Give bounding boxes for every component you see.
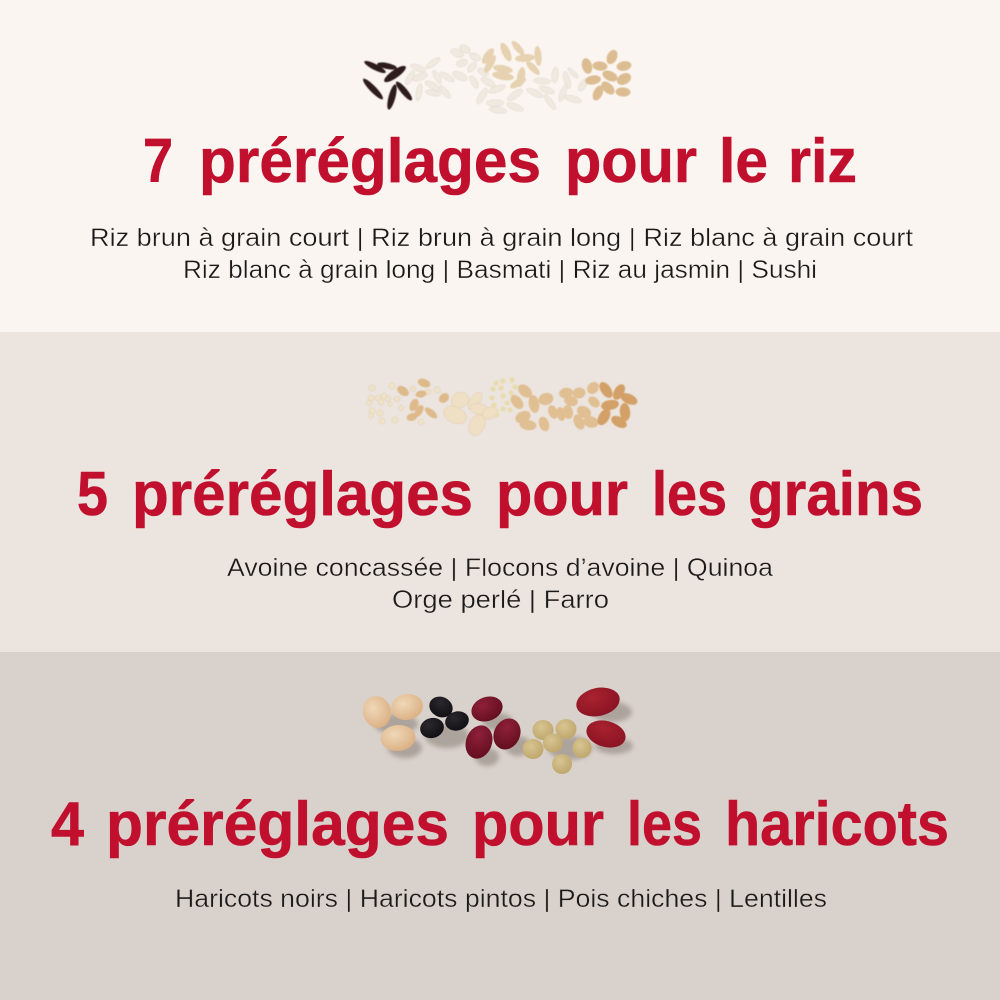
text: types de riz: Riz blanc à grain long | Basmati | Riz au jasmin | Sushi — [183, 256, 817, 284]
icon: grains de riz — [361, 39, 633, 114]
title: haricots: haricots — [725, 790, 949, 859]
panel: riz — [0, 0, 1000, 332]
title: haricots: 4 — [51, 790, 84, 859]
text: types de grains: Avoine concassée | Flocons d’avoine | Quinoa — [227, 554, 773, 582]
title: riz: le — [719, 127, 768, 196]
icon: haricots — [359, 684, 633, 774]
icon: grains — [366, 377, 639, 438]
title: haricots: préréglages — [106, 790, 449, 859]
title: riz: riz — [788, 127, 857, 196]
text: types de haricots: Haricots noirs | Haricots pintos | Pois chiches | Lentilles — [175, 885, 827, 913]
title: haricots: les — [627, 790, 702, 859]
title: grains: préréglages — [132, 460, 473, 529]
title: riz: préréglages — [199, 127, 541, 196]
text: types de grains — [227, 554, 773, 614]
title: grains: pour — [496, 460, 628, 529]
text: types de grains: Orge perlé | Farro — [392, 586, 609, 614]
title: grains: grains — [748, 460, 923, 529]
title: haricots: pour — [472, 790, 604, 859]
text: types de riz — [90, 224, 913, 284]
title: riz: pour — [565, 127, 697, 196]
text: types de riz: Riz brun à grain court | Riz brun à grain long | Riz blanc à grain court — [90, 224, 913, 252]
title: grains: 5 — [77, 460, 108, 529]
title: riz: 7 — [143, 127, 173, 196]
title: grains: les — [652, 460, 727, 529]
panel: grains — [0, 332, 1000, 652]
panel: haricots — [0, 652, 1000, 1000]
